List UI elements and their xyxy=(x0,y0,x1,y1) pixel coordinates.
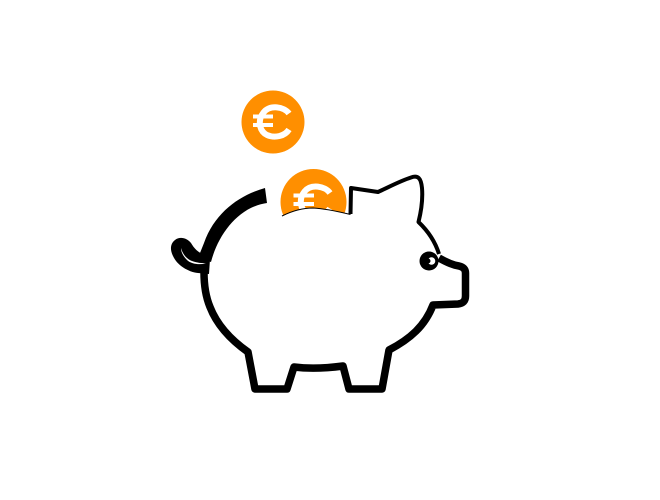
pig body and legs xyxy=(204,258,466,389)
piggy bank illustration xyxy=(170,90,470,393)
pig eye xyxy=(420,252,438,270)
pig tail xyxy=(171,238,210,274)
coin slot edge xyxy=(282,208,350,216)
pig head and ear xyxy=(350,177,439,254)
icon: falling euro coin xyxy=(242,90,304,154)
icon: euro coin entering slot xyxy=(280,169,346,215)
pig back stroke xyxy=(198,188,267,262)
